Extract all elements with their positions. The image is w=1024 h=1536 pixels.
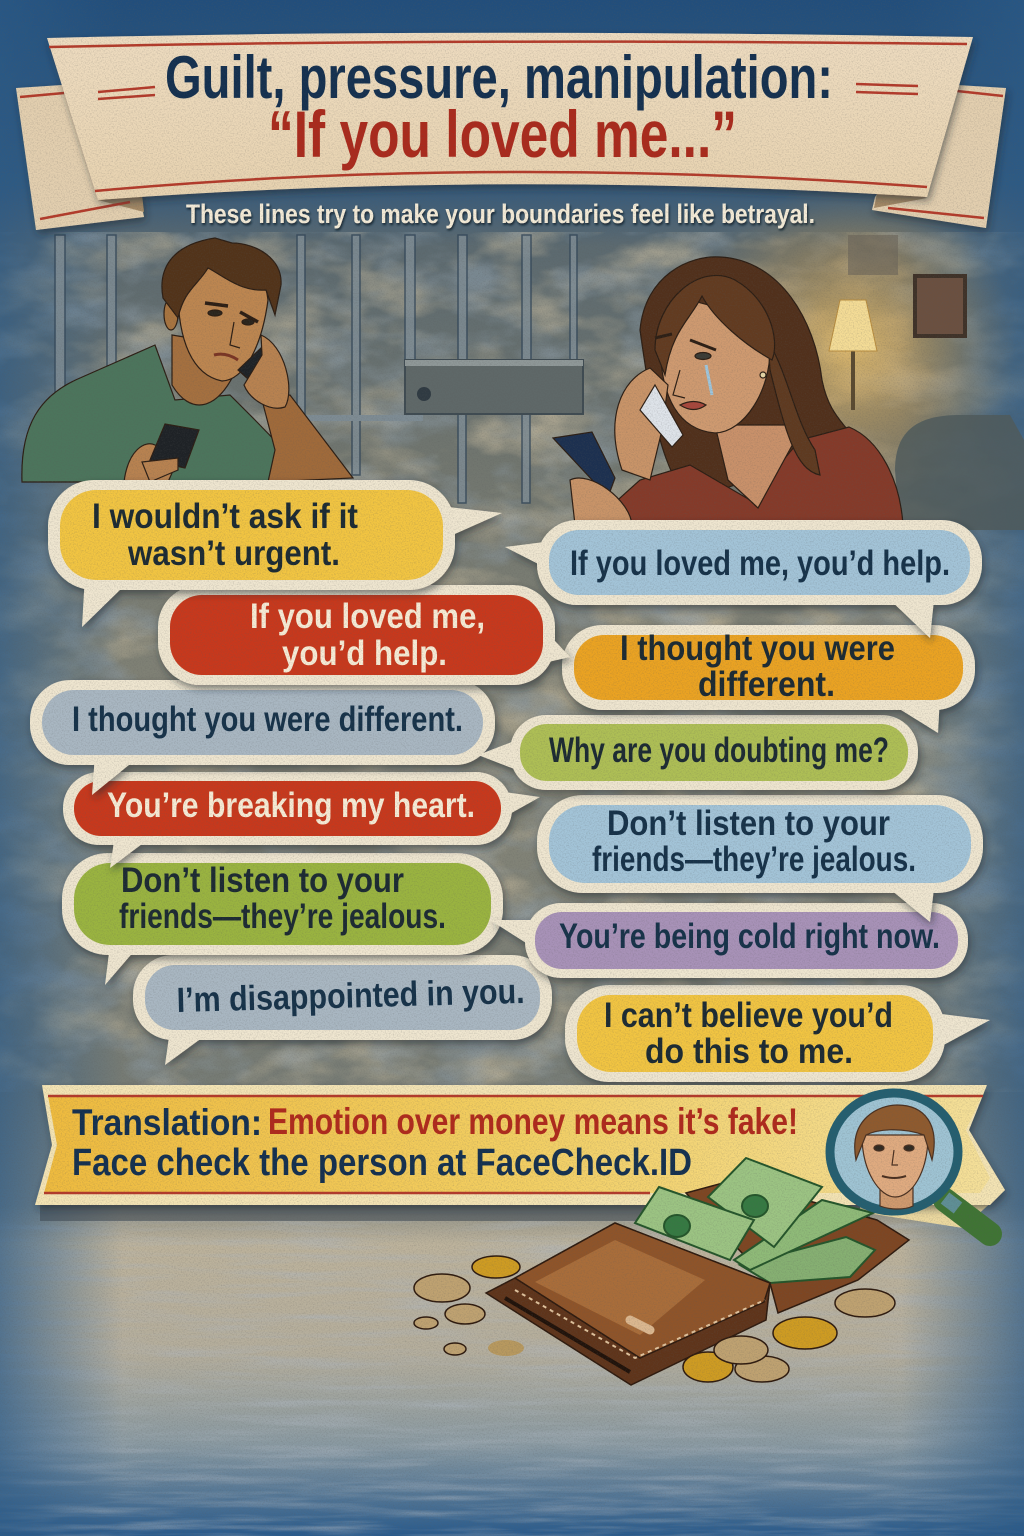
text <box>250 597 485 673</box>
woman crying <box>553 257 903 525</box>
bubble: I wouldn't ask <box>48 480 502 627</box>
bubble: why doubting <box>478 715 918 790</box>
text: do this to me. <box>645 1032 853 1071</box>
wallet back <box>686 1180 909 1313</box>
translation banner <box>35 1085 1005 1228</box>
warning line: Emotion over money means it’s fake! <box>268 1101 798 1142</box>
left ribbon <box>16 85 144 230</box>
bubble: don't listen blue <box>537 795 983 922</box>
text: Don’t listen to your <box>607 804 890 843</box>
bubble: if you loved me red <box>158 585 570 685</box>
subtitle: These lines try to make your boundaries feel like betrayal. <box>186 199 815 229</box>
text <box>92 497 358 573</box>
text <box>592 804 916 879</box>
text: I can’t believe you’d <box>604 996 893 1035</box>
bubble: breaking my heart <box>63 772 540 868</box>
text <box>620 629 895 704</box>
bubble: I thought orange <box>562 625 975 733</box>
text: I thought you were different. <box>72 700 463 739</box>
text <box>604 996 893 1071</box>
text: You’re breaking my heart. <box>107 786 475 825</box>
wall picture <box>915 276 965 336</box>
title line 2: “If you loved me...” <box>268 97 737 171</box>
man on phone <box>22 238 353 482</box>
bubble: I thought grey <box>30 680 495 795</box>
main banner <box>47 33 973 200</box>
text: wasn’t urgent. <box>127 534 340 573</box>
right ribbon <box>872 85 1006 228</box>
couch <box>895 415 1024 530</box>
text <box>119 861 446 936</box>
bubble: can't believe <box>565 985 990 1082</box>
text: If you loved me, you’d help. <box>570 544 950 583</box>
lamp <box>829 300 877 410</box>
coins <box>414 1256 895 1382</box>
translation label: Translation: <box>72 1102 262 1143</box>
title line 1: Guilt, pressure, manipulation: <box>165 44 833 111</box>
wallet front <box>486 1223 770 1385</box>
text: friends—they’re jealous. <box>592 840 916 879</box>
text: If you loved me, <box>250 597 485 636</box>
text: Don’t listen to your <box>121 861 404 900</box>
face in lens <box>855 1105 934 1209</box>
door plate <box>405 360 583 414</box>
text: I thought you were <box>620 629 895 668</box>
bubble: disappointed <box>133 955 552 1065</box>
bubble: being cold <box>490 903 968 978</box>
bubble: if you loved me blue <box>505 520 982 638</box>
text: I’m disappointed in you. <box>176 972 525 1020</box>
title banner <box>16 33 1006 230</box>
text: You’re being cold right now. <box>559 917 940 956</box>
text: different. <box>698 665 835 704</box>
text: Why are you doubting me? <box>549 731 889 770</box>
text: friends—they’re jealous. <box>119 897 446 936</box>
text: I wouldn’t ask if it <box>92 497 358 536</box>
bubble: don't listen green <box>62 853 503 985</box>
magnifying glass <box>830 1093 990 1234</box>
text: you’d help. <box>282 634 447 673</box>
facecheck line: Face check the person at FaceCheck.ID <box>72 1142 692 1184</box>
room backdrop <box>55 180 1024 530</box>
floor texture area <box>0 1220 1024 1536</box>
wallet with cash <box>414 1158 909 1385</box>
bills <box>635 1158 875 1283</box>
